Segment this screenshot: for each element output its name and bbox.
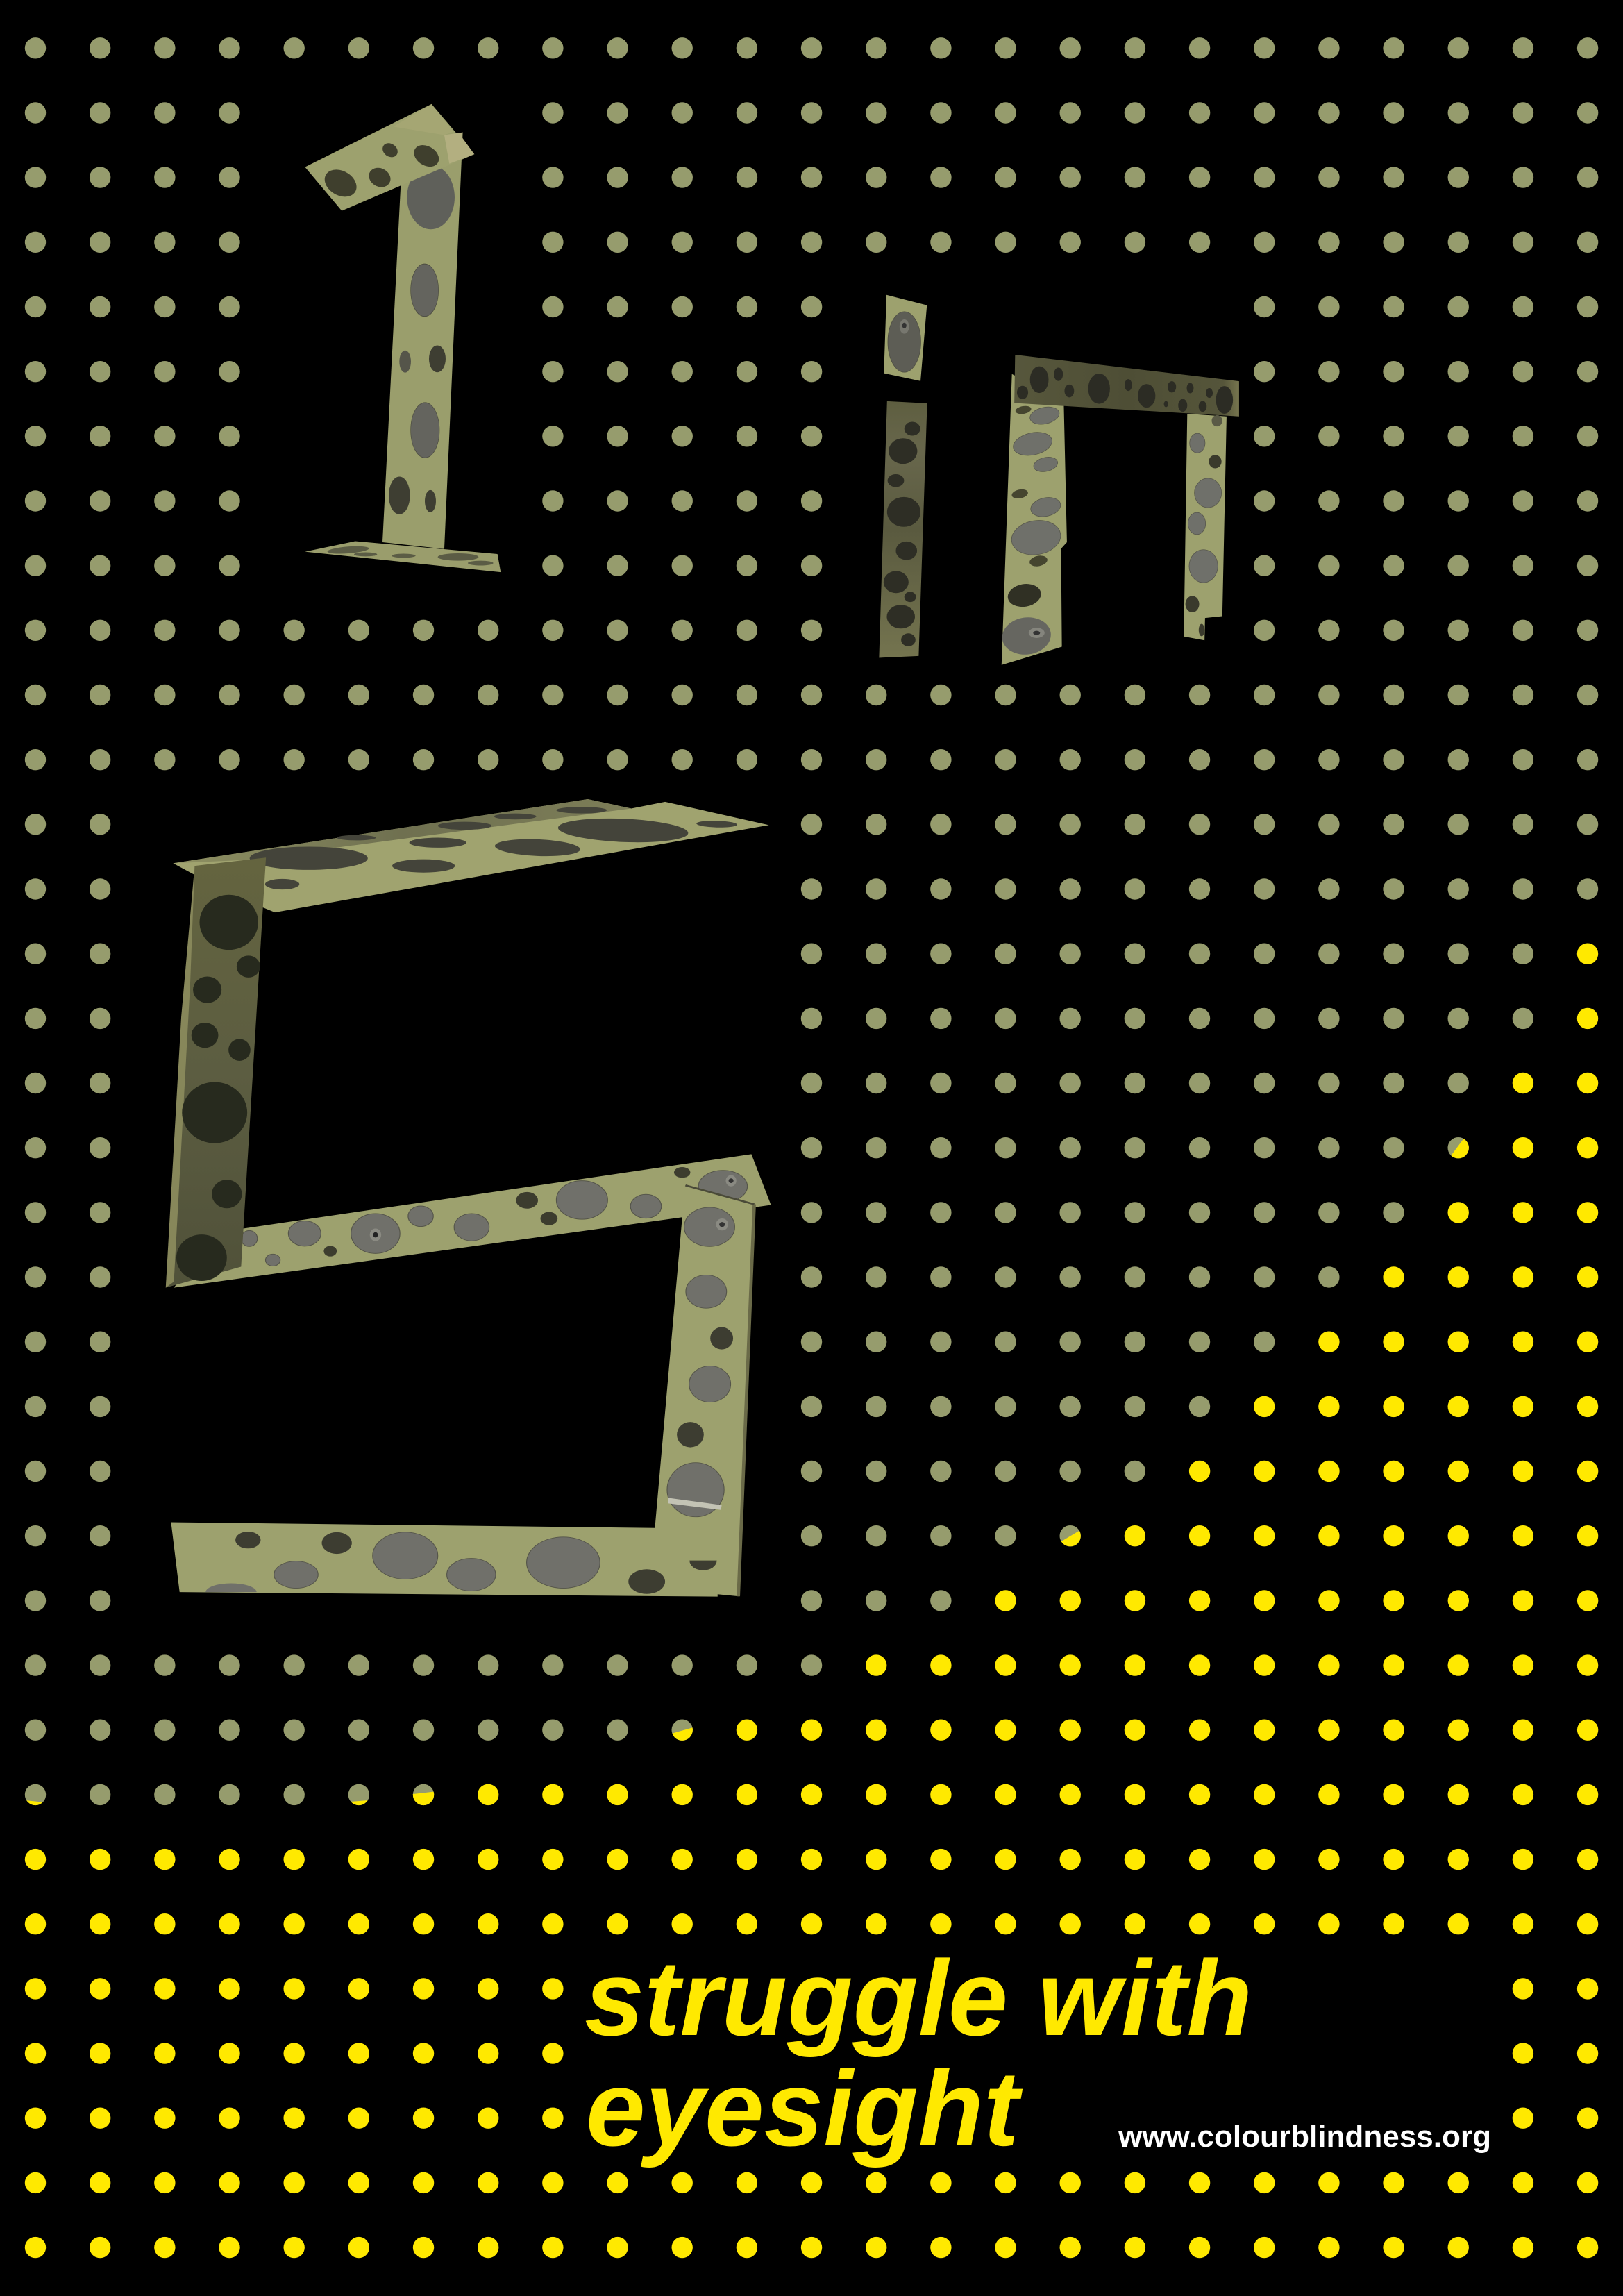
stem of the 1 <box>382 133 463 549</box>
word "in" made of spotted paper strips <box>879 295 1239 665</box>
right vertical and bottom bar of the 5 <box>171 1185 755 1597</box>
top bar of the 5 <box>173 799 769 912</box>
left vertical of the 5 <box>166 857 266 1288</box>
dot of the i <box>884 295 927 381</box>
top bar of the n <box>1014 355 1239 417</box>
numeral 1 made of spotted paper strips <box>305 104 501 572</box>
headline line 1: struggle with <box>585 1938 1252 2058</box>
left leg of the n <box>1000 374 1067 665</box>
website url: www.colourblindness.org <box>1118 2120 1491 2154</box>
base of the 1 <box>305 542 501 572</box>
flag of the 1 <box>305 104 474 211</box>
diagonal middle bar of the 5 <box>174 1154 771 1288</box>
stem of the i <box>879 401 927 657</box>
right leg of the n <box>1184 414 1227 640</box>
headline text <box>585 1938 1252 2168</box>
headline line 2: eyesight <box>586 2049 1023 2168</box>
dot grid: yellow dots spreading diagonally <box>35 954 1588 2247</box>
numeral 5 made of spotted paper strips <box>166 799 771 1597</box>
dot grid: unaffected olive dots <box>35 48 1588 1795</box>
partially yellow dots along the boundary <box>25 1137 1469 1805</box>
